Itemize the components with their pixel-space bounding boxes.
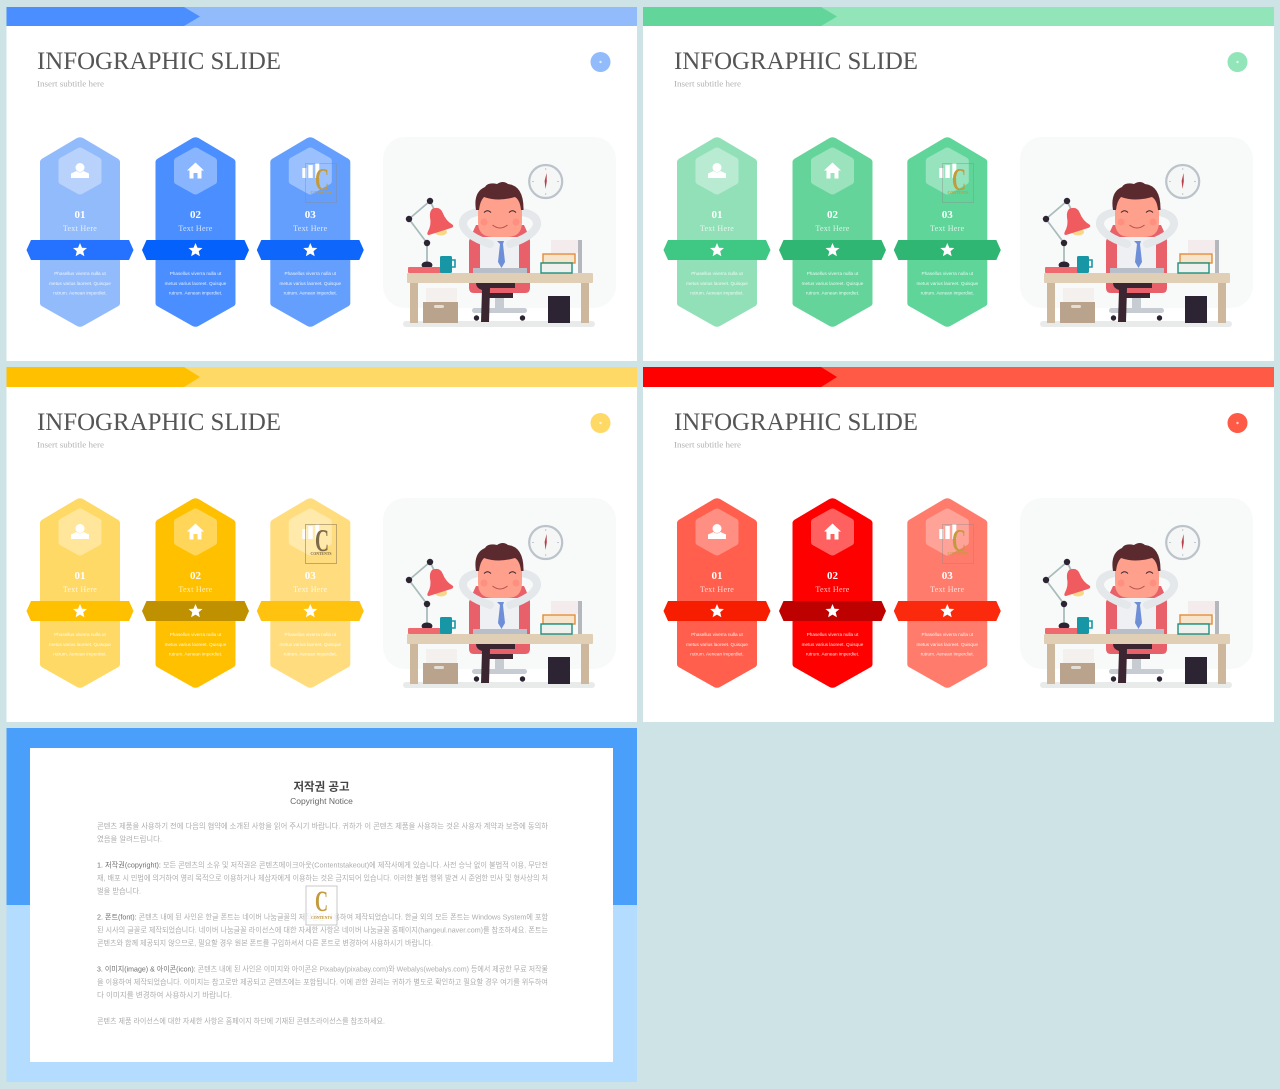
card 02 <box>142 137 249 327</box>
card 02 <box>142 498 249 688</box>
clause 3: 3. 이미지(image) & 아이콘(icon): 콘텐츠 내에 된 사인은 이미지와 아이콘은 Pixabay(pixabay.com)와 Webalys(webalys.com) 등에서 제공한 무료 저작물 <box>97 964 548 974</box>
clause 1 <box>97 860 548 896</box>
card 01: Text Here <box>63 224 97 233</box>
card 01: Text Here <box>700 585 734 594</box>
card 02: 02 <box>190 209 202 221</box>
card 03: 03 <box>305 570 316 582</box>
top bar: blue <box>6 7 637 26</box>
clause 1: 벌을 받습니다. <box>97 886 141 896</box>
card 03: Text Here <box>293 585 328 594</box>
clause 1: 재, 배포 시 민법에 의거하여 영리 목적으로 이용하거나 제삼자에게 이용하는 것은 금지되어 있습니다. 이러한 불법 행위 발견 시 준엄한 민사 및 형사상의 처 <box>97 872 548 882</box>
panel: green slide <box>643 7 1274 361</box>
card 02: 02 <box>827 570 838 582</box>
card 03: 03 <box>305 209 316 221</box>
panel: yellow slide <box>6 367 637 722</box>
top bar: green <box>643 7 1274 26</box>
card 01: metus varius laoreet. Quisque <box>49 281 111 286</box>
card 01: metus varius laoreet. Quisque <box>686 281 748 286</box>
watermark <box>306 161 336 202</box>
heading: 저작권 공고 <box>293 780 350 794</box>
watermark <box>942 522 974 564</box>
clause 2: 된 시사의 글꼴로 제작되었습니다. 네이버 나눔글꼴 라이선스에 대한 자세한 사항은 네이버 나눔글꼴 홈페이지(hangeul.naver.com)를 참조하세요. 폰트는 <box>97 924 548 934</box>
card 02: Phasellus viverra nulla ut <box>170 271 222 276</box>
card 01: rutrum. Aenean imperdiet. <box>690 652 744 656</box>
icon: bars <box>939 163 956 178</box>
clause 1: 1. 저작권(copyright): 모든 콘텐츠의 소유 및 저작권은 콘텐츠메이크아웃(Contentstakeout)에 제작사에게 있습니다. 사전 승낙 없이 불법적 이용, 무단전 <box>97 860 548 870</box>
card 03: metus varius laoreet. Quisque <box>916 281 979 286</box>
card 01: Text Here <box>700 224 734 233</box>
card 01: Text Here <box>63 585 97 594</box>
icon: bars <box>939 524 956 539</box>
card 01: 01 <box>74 209 86 221</box>
card 02: metus varius laoreet. Quisque <box>165 281 227 286</box>
icon: house <box>187 524 204 540</box>
icon: house <box>824 162 841 178</box>
icon: bars <box>302 524 319 539</box>
illustration: man relaxing at desk <box>1020 137 1253 327</box>
title: INFOGRAPHIC SLIDE <box>37 407 281 436</box>
icon: person <box>708 163 726 178</box>
icon: star <box>710 243 724 256</box>
card 02: metus varius laoreet. Quisque <box>802 281 864 286</box>
card 02: Text Here <box>178 224 213 233</box>
clause 3: 을 이용하여 제작되었습니다. 이미지는 참고로만 제공되고 콘텐츠에는 포함됩니다. 이에 관한 권리는 귀하가 별도로 확인하고 필요할 경우 여기를 위두하여 <box>97 976 548 986</box>
watermark <box>942 161 974 202</box>
card 03: metus varius laoreet. Quisque <box>279 642 342 647</box>
card 02: Text Here <box>178 585 213 594</box>
card 01 <box>26 498 134 688</box>
icon: person <box>708 524 726 539</box>
card 01: rutrum. Aenean imperdiet. <box>53 652 107 656</box>
card 01 <box>664 498 770 688</box>
panel: copyright notice <box>6 728 637 1082</box>
card 03: Phasellus viverra nulla ut <box>922 632 974 637</box>
card 01: metus varius laoreet. Quisque <box>49 642 111 647</box>
icon: person <box>71 163 89 178</box>
card 03: 03 <box>942 209 953 221</box>
icon: bars <box>302 163 319 178</box>
title: INFOGRAPHIC SLIDE <box>674 407 918 436</box>
icon: star <box>826 604 840 617</box>
card 03: metus varius laoreet. Quisque <box>279 281 342 286</box>
illustration: man relaxing at desk <box>383 498 616 688</box>
closing note: 콘텐츠 제품 라이선스에 대한 자세한 사항은 홈페이지 하단에 기재된 콘텐츠라이선스를 참조하세요. <box>97 1016 385 1026</box>
panel: red slide <box>643 367 1274 722</box>
clause 2: 2. 폰트(font): 콘텐츠 내에 된 사인은 한글 폰트는 네이버 나눔글꼴의 저작물을 사용하여 제작되었습니다. 한글 외의 모든 폰트는 Windows System에 포함 <box>97 912 548 922</box>
card 01: metus varius laoreet. Quisque <box>686 642 748 647</box>
icon: star <box>303 604 317 617</box>
card 01: rutrum. Aenean imperdiet. <box>53 290 107 296</box>
icon: star <box>710 604 724 617</box>
card 02: Phasellus viverra nulla ut <box>170 632 222 637</box>
icon: star <box>303 243 317 256</box>
badge <box>1228 52 1248 72</box>
card 03: metus varius laoreet. Quisque <box>916 642 979 647</box>
card 03: Phasellus viverra nulla ut <box>285 632 337 637</box>
icon: star <box>826 243 840 256</box>
card 02: 02 <box>190 570 202 582</box>
card 01: 01 <box>712 570 722 582</box>
card 01: rutrum. Aenean imperdiet. <box>690 290 744 296</box>
card 03: rutrum. Aenean imperdiet. <box>284 652 337 656</box>
icon: star <box>940 243 954 256</box>
card 03 <box>257 137 364 327</box>
card 02: rutrum. Aenean imperdiet. <box>806 290 859 296</box>
clause 3: 다 이미지를 변경하여 사용하시기 바랍니다. <box>97 990 232 1000</box>
subtitle: Insert subtitle here <box>674 440 741 450</box>
card 02: Text Here <box>815 224 850 233</box>
card 01 <box>664 137 770 327</box>
icon: star <box>940 604 954 617</box>
subtitle: Insert subtitle here <box>674 78 741 88</box>
badge <box>590 52 610 72</box>
card 02: metus varius laoreet. Quisque <box>165 642 227 647</box>
card 01 <box>26 137 134 327</box>
panel: blue slide <box>6 7 637 361</box>
card 02 <box>779 137 886 327</box>
icon: star <box>73 243 87 256</box>
card 02: Phasellus viverra nulla ut <box>807 271 859 276</box>
title: INFOGRAPHIC SLIDE <box>37 46 281 75</box>
card 02: rutrum. Aenean imperdiet. <box>169 290 222 296</box>
card 03 <box>894 498 1001 688</box>
icon: person <box>71 524 89 539</box>
card 03: Text Here <box>293 224 328 233</box>
watermark: CONTENTS <box>311 915 333 920</box>
illustration: man relaxing at desk <box>1020 498 1253 688</box>
badge <box>590 413 610 433</box>
card 02: Text Here <box>815 585 850 594</box>
card 03 <box>257 498 364 688</box>
title: INFOGRAPHIC SLIDE <box>674 46 918 75</box>
card 01: Phasellus viverra nulla ut <box>691 271 744 276</box>
card 02: rutrum. Aenean imperdiet. <box>806 652 859 656</box>
card 03: Text Here <box>930 224 965 233</box>
clause 2: 콘텐츠와 함께 제공되지 않으므로, 필요할 경우 원본 폰트를 구입하셔서 다른 폰트로 변경하여 사용하시기 바랍니다. <box>97 938 433 948</box>
card 02: metus varius laoreet. Quisque <box>802 642 864 647</box>
card 02: rutrum. Aenean imperdiet. <box>169 652 222 656</box>
illustration: man relaxing at desk <box>383 137 616 327</box>
subtitle: Insert subtitle here <box>37 440 104 450</box>
card 03: Text Here <box>930 585 965 594</box>
card 02: Phasellus viverra nulla ut <box>807 632 859 637</box>
icon: star <box>188 604 202 617</box>
icon: house <box>187 162 204 178</box>
subheading: Copyright Notice <box>290 796 353 806</box>
badge <box>1228 413 1248 433</box>
card 01: 01 <box>74 570 86 582</box>
card 03: rutrum. Aenean imperdiet. <box>921 652 974 656</box>
card 01: Phasellus viverra nulla ut <box>691 632 744 637</box>
card 02: 02 <box>827 209 838 221</box>
icon: star <box>188 243 202 256</box>
card 01: Phasellus viverra nulla ut <box>54 632 107 637</box>
clause 2 <box>97 912 548 948</box>
subtitle: Insert subtitle here <box>37 78 104 88</box>
card 02 <box>779 498 886 688</box>
watermark <box>306 885 337 925</box>
card 03: Phasellus viverra nulla ut <box>922 271 974 276</box>
top bar: yellow <box>6 367 637 387</box>
card 01: 01 <box>712 209 722 221</box>
card 03: 03 <box>942 570 953 582</box>
intro paragraph <box>97 820 548 844</box>
intro paragraph: 였음을 알려드립니다. <box>97 834 162 844</box>
intro paragraph: 콘텐츠 제품을 사용하기 전에 다음의 협약에 소개된 사항을 읽어 주시기 바랍니다. 귀하가 이 콘텐츠 제품을 사용하는 것은 사용자 계약과 보증에 동의하 <box>97 820 548 830</box>
top bar: red <box>643 367 1274 387</box>
icon: star <box>73 604 87 617</box>
watermark: C <box>315 885 328 918</box>
card 03: rutrum. Aenean imperdiet. <box>284 290 337 296</box>
card 01: Phasellus viverra nulla ut <box>54 271 107 276</box>
watermark <box>306 522 336 564</box>
card 03: Phasellus viverra nulla ut <box>285 271 337 276</box>
card 03: rutrum. Aenean imperdiet. <box>921 290 974 296</box>
icon: house <box>824 524 841 540</box>
clause 3 <box>97 964 548 1000</box>
card 03 <box>894 137 1001 327</box>
